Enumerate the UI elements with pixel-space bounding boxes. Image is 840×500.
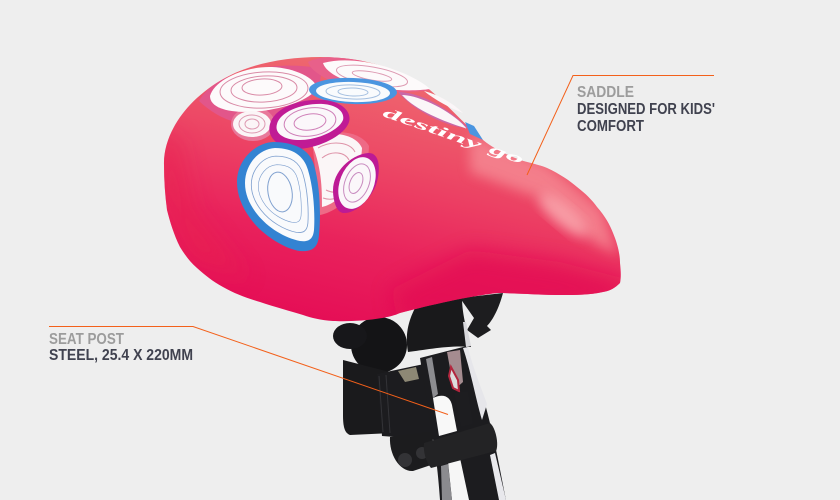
bracket ridges xyxy=(379,375,390,433)
lower bolts xyxy=(398,453,412,467)
graphic: magenta ring shape xyxy=(269,100,350,149)
leader line: saddle xyxy=(527,76,714,175)
saddle shading xyxy=(155,57,630,325)
leader line: seat post xyxy=(49,326,448,414)
chrome tube xyxy=(420,346,506,500)
front bracket xyxy=(377,364,436,440)
callout: seat post xyxy=(49,326,448,414)
small nut xyxy=(398,367,419,382)
seat post xyxy=(333,293,506,500)
red reflection xyxy=(449,367,459,391)
graphic: blue ring top xyxy=(309,76,397,106)
label: saddle heading: SADDLE xyxy=(577,84,634,101)
rear rail xyxy=(460,293,503,338)
clamp washer xyxy=(351,317,407,373)
graphic: pale ring shape xyxy=(310,134,362,207)
label: saddle detail: DESIGNED FOR KIDS' xyxy=(577,101,715,118)
rear bracket xyxy=(343,360,392,435)
label: seat post heading: SEAT POST xyxy=(49,331,124,348)
dark slot xyxy=(454,391,473,427)
callout: saddle xyxy=(527,76,715,175)
graphic: right rear ring shapes xyxy=(402,91,483,140)
graphic: small white ring shape xyxy=(233,111,271,137)
callout: saddle: COMFORT xyxy=(577,118,644,135)
graphic: large blue ring shape xyxy=(237,142,320,251)
chrome highlights xyxy=(433,396,457,436)
product diagram: saddle and seat post xyxy=(49,57,714,500)
reflection in tube xyxy=(447,350,463,390)
graphic: large white ring shape xyxy=(210,67,317,112)
clamp bolt xyxy=(333,323,367,349)
lower clamp block xyxy=(390,432,440,471)
brand script on saddle: destiny go xyxy=(381,106,526,168)
graphic: small magenta ring shape xyxy=(331,152,383,214)
collar band xyxy=(424,423,497,468)
saddle body xyxy=(164,57,621,321)
graphic: top rear ring shape xyxy=(323,60,430,91)
label: seat post detail: STEEL, 25.4 X 220MM xyxy=(49,347,193,364)
halo shapes xyxy=(199,66,321,123)
saddle xyxy=(155,57,630,325)
post head xyxy=(407,298,471,352)
